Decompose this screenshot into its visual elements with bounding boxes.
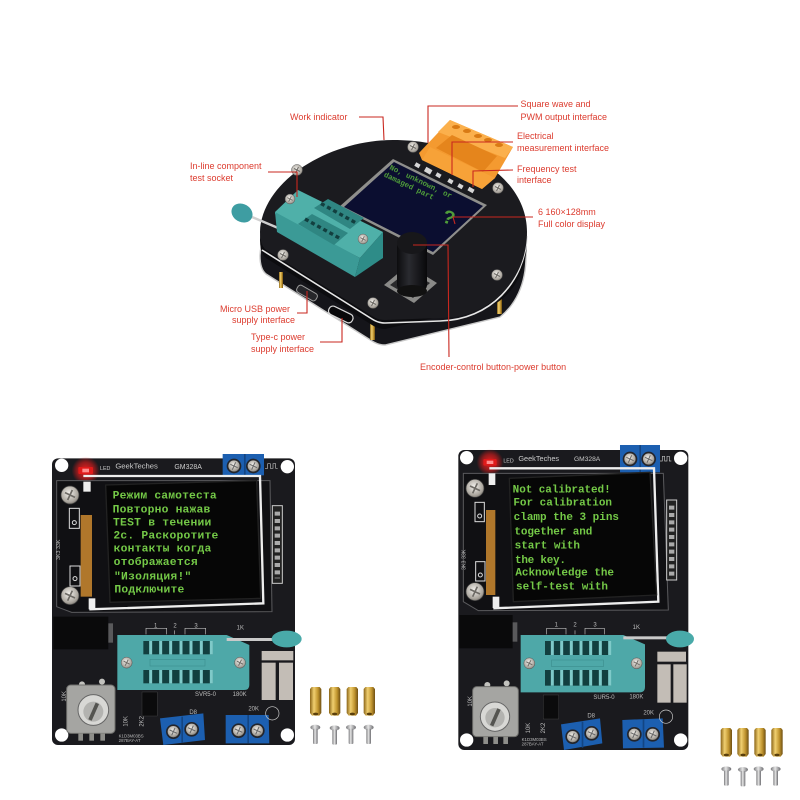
frame screws [466,479,484,601]
middle PCB layer [260,148,527,329]
silkscreen labels: 20K [643,710,654,716]
LCD self-test text [113,490,219,597]
mounting holes [460,451,687,747]
silkscreen labels: SVR5-0 [195,692,217,698]
callout: encoder button [413,245,566,372]
display question mark icon: ? [439,206,458,232]
barrel jack [459,615,517,648]
ZIF lever and ball [227,631,302,647]
silkscreen labels: K1D3M03BS [522,737,547,742]
silkscreen labels [56,539,259,743]
ZIF lever and ball [623,631,694,647]
socket pin markers: 3 [194,623,198,629]
small screws [310,725,374,745]
silkscreen labels: 2K2 [139,715,145,727]
pin holes [475,502,485,581]
silkscreen labels: D8 [587,714,596,720]
silkscreen labels: 3K3 33K [461,549,467,570]
silkscreen labels: 3K3 33K [56,539,62,560]
circled U mark [266,707,279,720]
callout: micro USB: supply interface [232,315,295,325]
socket pin markers [146,623,206,634]
LCD self-test text: "Изоляция!" [114,571,191,583]
voltage regulator chip [543,695,559,719]
silkscreen labels: 180K [629,694,643,700]
LCD self-test text: отображается [114,556,198,569]
callout: square wave and PWM output: PWM output interface [520,112,607,122]
right accessories: brass standoffs and screws [721,728,783,786]
micro USB port [295,284,319,302]
silkscreen labels: 20K [248,707,259,713]
square wave symbol [265,464,278,468]
board brand text [100,462,202,472]
LCD carrier board [463,473,668,611]
LCD self-test text: Повторно нажав [113,505,211,517]
callout: in-line test socket: test socket [190,173,234,183]
callout: in-line test socket: In-line component [190,161,262,171]
barrel jack [53,617,113,649]
callout: electrical measurement: Electrical [517,131,554,141]
LCD calibration text: together and [514,526,592,538]
callout: in-line test socket [190,161,297,197]
silver pads [262,651,293,700]
rotary encoder [67,679,115,741]
display text: No, unknown, or [388,164,453,201]
silkscreen labels: SUR5-0 [593,695,615,701]
LCD calibration text: For calibration [513,498,612,510]
callout: work indicator: Work indicator [290,112,347,122]
LCD calibration text: start with [515,540,580,552]
PCB base [458,450,688,750]
callout: encoder button: Encoder-control button-power button [420,362,566,372]
LCD screen [106,481,261,602]
orange flex cable [81,515,92,597]
callout: electrical measurement [452,131,609,175]
teal ZIF test socket [275,190,383,277]
gold standoffs [279,272,502,340]
LCD calibration text: self-test with [516,581,608,593]
bottom acrylic plate [260,164,526,345]
left accessories: brass standoffs and screws [310,687,375,745]
PCB base [52,458,295,745]
pin header labels strip [414,162,475,193]
LCD carrier board [57,481,272,612]
silkscreen labels: 180K [233,692,247,698]
rotary encoder knob [384,232,437,303]
callout: micro USB: Micro USB power [220,304,290,314]
LCD calibration text: clamp the 3 pins [514,512,619,524]
type-c port [327,305,354,324]
board brand text: LED [503,458,514,464]
board brand text [503,454,601,464]
display with test screen [339,159,487,255]
silkscreen labels: 2K2 [541,722,547,733]
callout: display spec [453,207,606,229]
LCD screen [509,472,657,602]
callout: type-c [251,318,342,354]
callout: square wave and PWM output [428,99,607,143]
voltage regulator chip [142,692,157,716]
lever and ball handle [228,200,290,233]
callout: type-c: Type-c power [251,332,305,342]
left board: GM328A PCB with Russian screen [52,454,302,745]
top blue terminal [620,445,660,472]
socket pin markers: 2 [173,623,177,629]
LCD calibration text: the key. [515,555,566,567]
socket pin markers: 3 [593,623,597,629]
callout: frequency test: interface [517,175,552,185]
ZIF socket [521,635,645,692]
brass standoffs [310,687,375,716]
callout: display spec: Full color display [538,219,606,229]
product photo: round tester device [228,120,527,345]
small screws [721,766,781,786]
LCD self-test text: Подключите [114,585,185,597]
ZIF socket [117,635,249,690]
orange terminal connector [419,120,513,189]
display frame tabs [83,482,95,609]
bottom blue terminals [160,713,269,745]
frame screws [61,486,79,605]
LCD self-test text: 2с. Раскоротите [113,530,219,542]
board brand text: GeekTeches [518,454,559,463]
board brand text: LED [100,466,111,472]
callout: work indicator [290,112,384,140]
silkscreen labels: 1K [633,625,640,631]
top plate [260,140,527,320]
display text: damaged part [382,172,435,202]
white display frame [489,468,658,608]
silkscreen labels: 10K [123,716,129,727]
callout: square wave and PWM output: Square wave and [520,99,591,109]
callout: type-c: supply interface [251,344,314,354]
callout: frequency test: Frequency test [517,164,577,174]
LCD self-test text: контакты когда [114,544,212,556]
callout: electrical measurement: measurement interface [517,143,609,153]
socket pin markers: 1 [154,623,158,629]
silkscreen labels: D8 [189,710,198,716]
LCD self-test text: TEST в течении [113,517,212,529]
silkscreen labels [461,549,654,747]
square wave symbol [660,456,671,461]
silkscreen labels: 10K [62,691,68,702]
silkscreen labels: 1K [237,625,244,631]
pin header [667,500,677,580]
board brand text: GeekTeches [115,462,158,471]
rotary encoder [473,680,518,744]
top plate edge highlight [262,236,527,323]
bottom blue terminals [561,718,664,750]
silkscreen labels: 10K [526,723,532,733]
circled U mark [659,710,673,723]
red LED [72,457,100,485]
LCD self-test text: Режим самотеста [113,490,217,502]
LCD calibration text [513,484,619,593]
silkscreen labels: 10K [468,696,474,707]
socket pin markers [547,623,604,634]
pin holes [69,508,80,586]
display frame tabs [489,473,499,608]
top blue terminal [223,454,264,475]
board brand text: GM328A [574,456,601,463]
LCD calibration text: Acknowledge the [515,568,614,580]
LCD calibration text: Not calibrated! [513,484,611,496]
callout: micro USB [220,291,307,325]
callout: display spec: 6 160×128mm [538,207,596,217]
socket pin markers: 2 [573,623,577,629]
brass standoffs [721,728,783,757]
right board: GM328A PCB with English screen [458,445,694,750]
mounting holes [55,459,294,742]
pin header [272,506,282,583]
white display frame [83,476,263,609]
silkscreen labels: 287BAY-AT [522,742,544,747]
silkscreen labels: 287BAY-AT [119,738,141,743]
silkscreen labels: K1D3M03BS [119,733,144,738]
orange flex cable [486,510,495,595]
silver pads [657,652,687,703]
socket pin markers: 1 [555,623,559,629]
plate corner screws [278,142,504,308]
red LED [477,449,503,476]
callout: frequency test [473,164,577,187]
board brand text: GM328A [174,464,202,471]
